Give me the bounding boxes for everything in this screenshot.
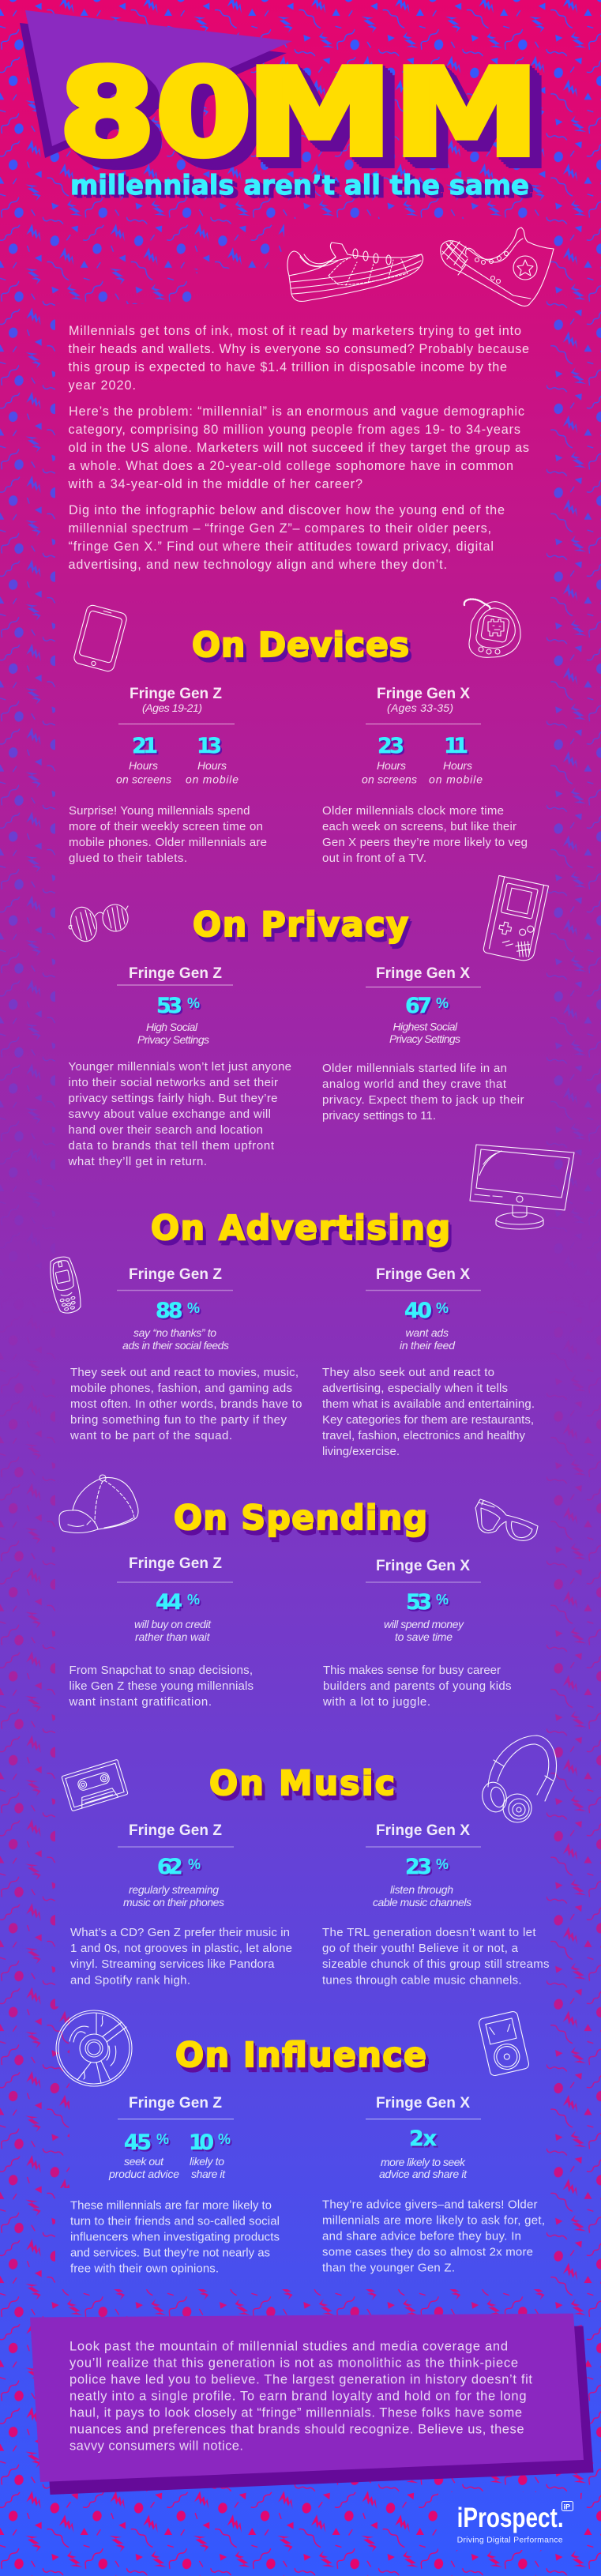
column: gen z: High Social <box>146 1021 198 1033</box>
column: gen x: Fringe Gen X <box>377 686 470 702</box>
intro text: Millennials get tons of ink, most of it read by marketers trying to get into <box>69 324 521 338</box>
column: gen z: (Ages 19-21) <box>142 701 202 714</box>
column: gen z: music on their phones <box>123 1896 224 1908</box>
column: gen z: rather than wait <box>135 1630 211 1643</box>
column: gen x: Fringe Gen X <box>376 965 470 982</box>
column: gen x <box>322 965 524 1123</box>
column: gen x: privacy. Expect them to jack up their <box>322 1093 524 1107</box>
column: gen x: 2x <box>409 2127 437 2151</box>
column: gen z: 1 and 0s, not grooves in plastic, let alone <box>70 1942 292 1955</box>
column: gen z: product advice <box>108 2168 179 2180</box>
column: gen x: on mobile <box>429 773 483 785</box>
column: gen z: on screens <box>116 773 171 785</box>
panel: on music <box>62 1736 556 1987</box>
column: gen x: Older millennials clock more time <box>322 804 504 818</box>
column: gen z: 53 <box>156 994 182 1018</box>
purple triangle <box>25 10 292 146</box>
column: gen z: 88 <box>156 1299 183 1323</box>
column: gen z: into their social networks and set their <box>68 1076 278 1089</box>
intro text: “fringe Gen X.” Find out where their attitudes toward privacy, digital <box>68 540 494 554</box>
column: gen x: 23 <box>378 734 404 758</box>
column: gen x: Fringe Gen X <box>376 1266 470 1283</box>
column: gen z: Surprise! Young millennials spend <box>69 804 250 818</box>
column: gen z: % <box>187 995 200 1011</box>
icon: round sunglasses <box>67 902 130 944</box>
icon: baseball cap <box>59 1475 138 1532</box>
subtitle: millennials aren’t all the same <box>70 170 529 201</box>
column: gen x: to save time <box>395 1630 453 1643</box>
column: gen z: what they’ll get in return. <box>68 1155 207 1168</box>
column: gen x <box>322 2095 545 2275</box>
column: gen x: sizeable chunck of this group still streams <box>322 1957 550 1971</box>
panel: on advertising <box>47 1145 574 1458</box>
column: gen x: and share advice before they buy. In <box>322 2229 521 2243</box>
column: gen x: This makes sense for busy career <box>323 1664 501 1677</box>
column: gen x: They’re advice givers–and takers! Older <box>322 2198 537 2212</box>
panel: on influence <box>56 2010 545 2275</box>
column: gen x: builders and parents of young kids <box>323 1679 512 1693</box>
column: gen x: than the younger Gen Z. <box>322 2261 455 2275</box>
column: gen x: 40 <box>404 1299 432 1323</box>
column: gen x: each week on screens, but like their <box>322 820 516 833</box>
panel: on spending <box>59 1475 538 1709</box>
column: gen z: 13 <box>197 734 222 758</box>
column: gen z: privacy settings fairly high. But they’re <box>68 1092 278 1105</box>
conclusion text: police have led you to believe. The largest generation in history doesn’t fit <box>69 2373 532 2387</box>
panel: conclusion <box>30 2314 594 2495</box>
intro text: Dig into the infographic below and discover how the young end of the <box>69 503 505 517</box>
column: gen z: share it <box>191 2168 226 2180</box>
column: gen x: travel, fashion, electronics and healthy <box>322 1429 526 1442</box>
column: gen z <box>69 1266 302 1442</box>
column: gen x: They also seek out and react to <box>322 1366 494 1379</box>
column: gen z: ads in their social feeds <box>122 1339 229 1352</box>
column: gen x: Hours <box>377 759 406 772</box>
column: gen x: 53 <box>406 1590 432 1615</box>
column: gen x: cable music channels <box>373 1896 471 1908</box>
column: gen z: regularly streaming <box>129 1883 219 1896</box>
column: gen x: out in front of a TV. <box>322 852 426 865</box>
column: gen z: vinyl. Streaming services like Pandora <box>70 1957 275 1971</box>
icon: game boy <box>483 875 548 963</box>
intro text: year 2020. <box>68 378 136 393</box>
column: gen z: % <box>187 1592 200 1608</box>
heading: On Spending <box>174 1499 427 1538</box>
header <box>20 10 554 306</box>
icon: computer monitor <box>470 1145 574 1229</box>
logo: iProspect: Driving Digital Performance <box>457 2535 563 2544</box>
column: gen z: data to brands that tell them upfront <box>68 1139 275 1153</box>
column: gen x: living/exercise. <box>322 1445 400 1458</box>
panel: on devices <box>69 600 528 865</box>
intro text: Here’s the problem: “millennial” is an enormous and vague demographic <box>69 404 524 419</box>
column: gen z: seek out <box>124 2155 164 2168</box>
column: gen z: Fringe Gen Z <box>129 1266 222 1283</box>
column: gen x: Highest Social <box>393 1021 458 1033</box>
column: gen x: listen through <box>390 1883 453 1896</box>
heading: On Privacy <box>193 906 408 945</box>
heading: On Music <box>209 1765 395 1803</box>
column: gen x: % <box>436 1300 449 1316</box>
column: gen z: and services. But they’re not nearly as <box>70 2247 270 2259</box>
column: gen x: advertising, especially when it tells <box>322 1382 508 1395</box>
column: gen z: free with their own opinions. <box>70 2262 219 2275</box>
column: gen z: mobile phones, fashion, and gaming ads <box>70 1382 292 1395</box>
column: gen x: Privacy Settings <box>389 1032 460 1045</box>
column: gen x: % <box>436 1592 449 1608</box>
column: gen x: Older millennials started life in an <box>322 1062 507 1075</box>
column: gen z <box>68 1555 254 1709</box>
column: gen x <box>322 1558 512 1709</box>
column: gen z: on mobile <box>186 773 239 785</box>
column: gen x: with a lot to juggle. <box>322 1695 430 1709</box>
column: gen z <box>70 2095 280 2275</box>
column: gen z: 10 <box>189 2130 214 2155</box>
column: gen z: influencers when investigating products <box>70 2231 280 2243</box>
column: gen x: Hours <box>443 759 472 772</box>
column: gen z: and Spotify rank high. <box>70 1973 190 1987</box>
column: gen x: Gen X peers they’re more likely to veg <box>322 836 528 849</box>
box <box>30 2314 584 2482</box>
column: gen z: bring something fun to the party if they <box>70 1413 287 1427</box>
panel: on privacy <box>67 875 548 1168</box>
column: gen z: Fringe Gen Z <box>129 965 222 982</box>
conclusion text: you’ll realize that this generation is not as monolithic as the think-piece <box>69 2356 518 2371</box>
column: gen z: like Gen Z these young millennials <box>69 1679 254 1693</box>
intro text: with a 34-year-old in the middle of her career? <box>68 477 362 491</box>
column: gen x: % <box>436 1856 449 1872</box>
conclusion text: nuances and preferences that brands should recognize. Believe us, these <box>69 2423 524 2437</box>
title: 80MM: MM <box>246 43 540 183</box>
heading: On Influence <box>175 2036 426 2075</box>
column: gen z: These millennials are far more likely to <box>70 2199 272 2212</box>
column: gen x: them what is available and entertaining. <box>322 1397 535 1411</box>
column: gen x: % <box>436 995 449 1011</box>
conclusion text: neatly into a single profile. To earn brand loyalty and hold on for the long <box>69 2390 526 2404</box>
icon: compact disc <box>56 2010 132 2086</box>
icon: sneaker <box>287 243 423 301</box>
column: gen z: most often. In other words, brands have to <box>70 1397 302 1411</box>
intro text: old in the US alone. Marketers will not succeed if they target the group as <box>68 441 529 455</box>
icon: wayfarer glasses <box>475 1499 538 1540</box>
column: gen z: Fringe Gen Z <box>129 2095 222 2112</box>
column: gen z: Fringe Gen Z <box>130 686 222 702</box>
column: gen x: millennials are more likely to ask for, get, <box>322 2213 545 2228</box>
column: gen x: in their feed <box>400 1339 456 1352</box>
conclusion text: savvy consumers will notice. <box>69 2439 243 2454</box>
icon: high-top sneaker <box>441 228 554 306</box>
icon: cassette tape <box>62 1759 128 1811</box>
column: gen x: Fringe Gen X <box>376 1558 470 1574</box>
intro text: advertising, and new technology align and where they don’t. <box>68 558 447 572</box>
column: gen z: 62 <box>157 1855 183 1879</box>
column: gen z: savvy about value exchange and will <box>68 1107 271 1121</box>
column: gen x: (Ages 33-35) <box>387 701 453 714</box>
column: gen x: 67 <box>405 994 432 1018</box>
column: gen x <box>322 1822 550 1987</box>
title: 80MM <box>59 43 540 183</box>
column: gen x: want ads <box>406 1326 449 1339</box>
box shadow <box>39 2326 594 2495</box>
intro text: millennial spectrum – “fringe Gen Z”– compares to their older peers, <box>68 521 491 536</box>
column: gen x: tunes through cable music channels. <box>322 1973 521 1987</box>
column: gen z: % <box>187 1300 200 1316</box>
icon: ipod <box>478 2010 530 2077</box>
column: gen z: Hours <box>129 759 158 772</box>
icon: headphones <box>479 1736 556 1822</box>
column: gen z: 21 <box>132 734 158 758</box>
column: gen z <box>69 686 267 865</box>
icon: nokia phone <box>47 1254 84 1315</box>
conclusion text: Look past the mountain of millennial studies and media coverage and <box>69 2340 508 2354</box>
intro text: this group is expected to have $1.4 trillion in disposable income by the <box>68 360 507 374</box>
logo: iProspect <box>457 2501 573 2544</box>
column: gen z: glued to their tablets. <box>69 852 187 865</box>
column: gen z: hand over their search and location <box>68 1123 263 1137</box>
icon: smartphone <box>73 604 128 672</box>
column: gen z: Hours <box>197 759 227 772</box>
column: gen z <box>70 1822 292 1987</box>
column: gen z: % <box>188 1856 201 1872</box>
column: gen x: 23 <box>405 1855 432 1879</box>
column: gen z: more of their weekly screen time on <box>69 820 263 833</box>
column: gen z: mobile phones. Older millennials are <box>69 836 267 849</box>
heading: On Devices <box>192 626 409 665</box>
column: gen z: 45 <box>124 2130 152 2155</box>
conclusion text: haul, it pays to look closely at “fringe” millennials. These folks have some <box>69 2406 522 2420</box>
column: gen x: analog world and they crave that <box>322 1077 507 1091</box>
icon: tamagotchi <box>464 600 520 657</box>
column: gen z: Younger millennials won’t let just anyone <box>68 1060 291 1074</box>
column: gen x: privacy settings to 11. <box>322 1109 436 1123</box>
column: gen x <box>322 1266 535 1458</box>
intro text: their heads and wallets. Why is everyone so consumed? Probably because <box>68 342 529 356</box>
column: gen z <box>68 965 291 1168</box>
column: gen x: 11 <box>444 734 468 758</box>
column: gen z: Fringe Gen Z <box>129 1555 222 1572</box>
column: gen z: What’s a CD? Gen Z prefer their music in <box>70 1926 290 1939</box>
column: gen x: go of their youth! Believe it or not, a <box>322 1942 519 1955</box>
column: gen z: 44 <box>156 1590 182 1615</box>
logo: iProspect: iProspect. <box>457 2503 564 2533</box>
conclusion text <box>69 2340 532 2454</box>
column: gen x: Fringe Gen X <box>376 1822 470 1839</box>
column: gen x: more likely to seek <box>381 2156 466 2168</box>
intro text <box>68 324 529 572</box>
column: gen z: will buy on credit <box>134 1618 212 1630</box>
column: gen z: % <box>156 2131 169 2147</box>
column: gen z: They seek out and react to movies, music, <box>70 1366 299 1379</box>
column: gen z: likely to <box>190 2155 224 2168</box>
column: gen z: want instant gratification. <box>68 1695 212 1709</box>
column: gen x: The TRL generation doesn’t want to let <box>322 1926 536 1939</box>
column: gen z: % <box>218 2131 231 2147</box>
title: 80MM: 80 <box>59 43 252 183</box>
column: gen x: Fringe Gen X <box>376 2095 470 2112</box>
column: gen x: some cases they do so almost 2x more <box>322 2245 533 2259</box>
column: gen x <box>322 686 528 865</box>
intro text: category, comprising 80 million young people from ages 19- to 34-years <box>68 423 520 437</box>
column: gen z: Fringe Gen Z <box>129 1822 222 1839</box>
column: gen z: From Snapchat to snap decisions, <box>69 1664 253 1677</box>
column: gen x: Key categories for them are restaurants, <box>322 1413 534 1427</box>
column: gen z: Privacy Settings <box>137 1033 209 1046</box>
column: gen x: will spend money <box>384 1618 464 1630</box>
column: gen x: on screens <box>362 773 417 785</box>
column: gen z: want to be part of the squad. <box>69 1429 232 1442</box>
heading: On Advertising <box>151 1209 450 1248</box>
logo: iProspect: iP <box>564 2503 570 2510</box>
column: gen z: turn to their friends and so-called social <box>70 2215 280 2228</box>
column: gen z: say “no thanks” to <box>133 1326 216 1339</box>
intro text: a whole. What does a 20-year-old college sophomore have in common <box>68 459 513 473</box>
column: gen x: advice and share it <box>379 2168 468 2180</box>
purple triangle shadow <box>20 23 287 158</box>
